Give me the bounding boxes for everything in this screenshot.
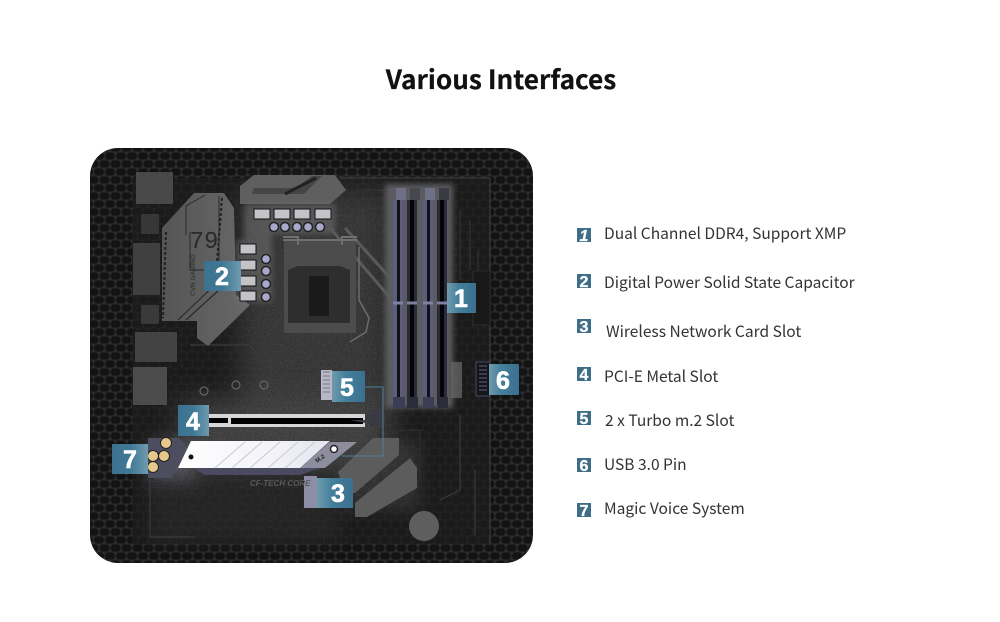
title: Various Interfaces: [385, 59, 616, 97]
power chokes: [240, 209, 331, 301]
tag 6: [489, 364, 519, 395]
I/O ports: [133, 172, 177, 405]
tag 3: [317, 478, 353, 508]
CPU socket: [283, 228, 392, 342]
M.2 slot top: [321, 370, 332, 400]
item 1: Dual Channel DDR4, Support XMP: [604, 222, 846, 244]
USB 3.0 pin header: [476, 362, 490, 396]
top heatsink: [240, 175, 346, 204]
tag 4: [178, 405, 209, 436]
tag 6: 6: [496, 367, 510, 395]
tag 4: 4: [186, 408, 200, 436]
SATA connector strip: [451, 362, 462, 398]
VRM heatsink: 79: [190, 229, 218, 256]
tag 7: 7: [123, 446, 137, 474]
DDR4 slots: [385, 184, 453, 408]
tag 7: [112, 444, 148, 474]
item 2: 2: [580, 274, 589, 291]
tag 2: [204, 261, 241, 291]
tag 5: [332, 371, 365, 402]
item 3: Wireless Network Card Slot: [606, 320, 801, 342]
item 3: 3: [580, 319, 589, 336]
tag 2: 2: [215, 263, 229, 291]
bottom M.2 slot: [304, 476, 317, 508]
board traces and small components: [150, 178, 490, 545]
VRM heatsink: CVN GAMING: [190, 254, 197, 296]
magic voice system capacitors: [148, 438, 186, 478]
connector line from 5: [342, 387, 383, 456]
item 5: 2 x Turbo m.2 Slot: [605, 409, 734, 431]
item 6: USB 3.0 Pin: [604, 453, 687, 475]
solid state capacitors: [262, 222, 324, 302]
glow behind chokes: [236, 204, 335, 302]
VRM heatsink: [162, 193, 250, 346]
battery: [409, 511, 439, 541]
item 5: 5: [580, 411, 589, 428]
feature list: [577, 222, 856, 520]
tag 1: 1: [454, 285, 468, 313]
item 4: PCI-E Metal Slot: [604, 365, 718, 387]
panel: motherboard image: [90, 148, 533, 563]
item 7: 7: [580, 503, 589, 520]
item 6: 6: [580, 458, 589, 475]
tag 3: 3: [331, 480, 345, 508]
item 4: 4: [580, 367, 589, 384]
PCI-E metal slot: [207, 410, 383, 427]
item 7: Magic Voice System: [604, 497, 745, 519]
M.2 heatsink: [178, 441, 357, 475]
tag 5: 5: [340, 374, 354, 402]
tag 1: [447, 283, 476, 313]
brand mark: CF-TECH CORE: [250, 479, 311, 488]
diagonal silver plates: [338, 438, 417, 517]
item 1: 1: [580, 228, 589, 245]
M.2 heatsink: M.2: [315, 454, 327, 465]
motherboard base: [132, 178, 490, 544]
item 2: Digital Power Solid State Capacitor: [604, 271, 856, 293]
